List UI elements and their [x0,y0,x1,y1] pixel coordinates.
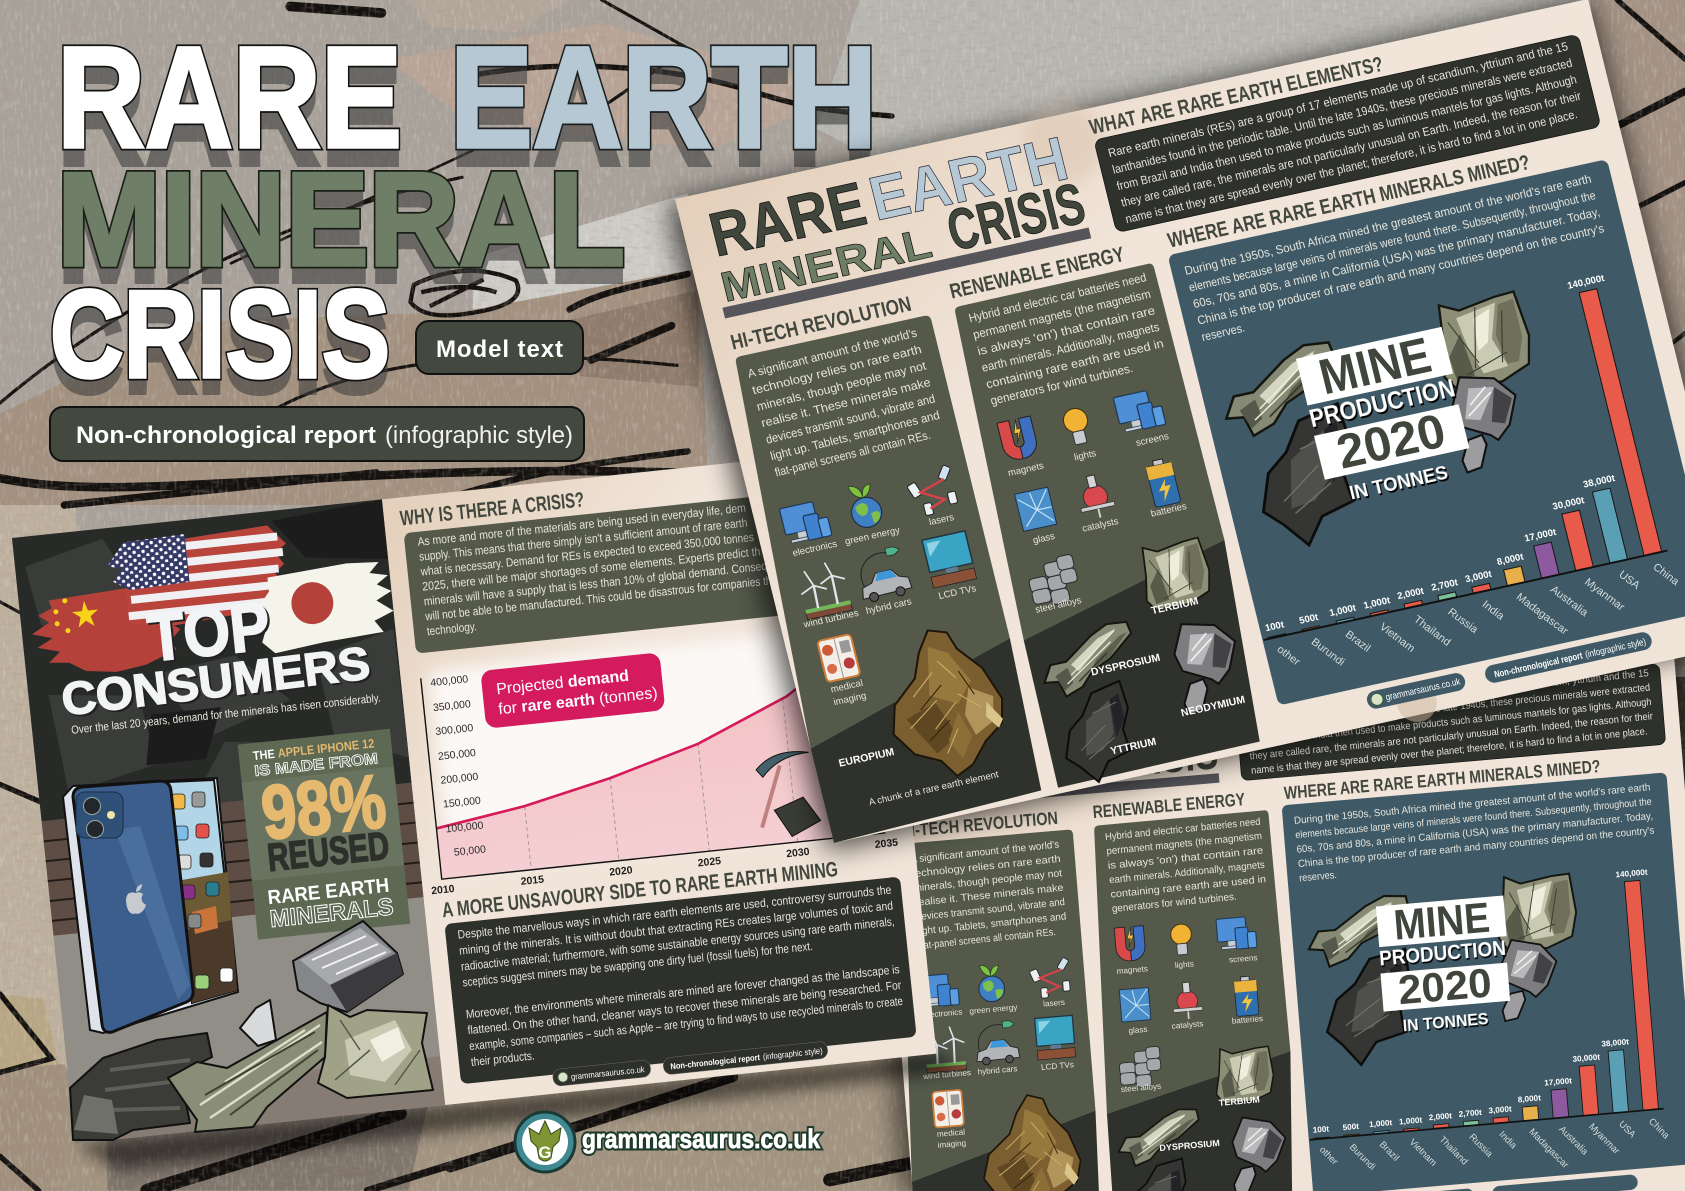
lower poster text: renewable energy [1092,788,1268,916]
lower poster text: where mined: During the 1950s, South Africa mined the greatest amount of the world's rare earth [1294,782,1651,827]
text block: why crisis: supply. This means that there simply isn't a sufficient amount of rare earth [418,516,748,564]
lower poster icon labels: TERBIUM [1219,1094,1260,1108]
icon and rock labels: wind turbines [802,608,860,631]
bar chart labels: Burundi [1309,636,1347,669]
heading: why crisis: WHY IS THERE A CRISIS? [399,488,585,531]
lower poster icon labels: screens [1229,953,1258,965]
heading: top consumers: TOP [146,590,276,678]
lower poster text: where mined: 60s, 70s and 80s, a mine in California (USA) was the primary manufacturer. Today, [1296,811,1653,856]
lower poster text: renewable energy: is always 'on') that contain rare [1107,845,1264,872]
text: renewable energy: Hybrid and electric car batteries need [967,270,1148,325]
text: what are rare earth elements: name is that they are spread evenly over the planet; therefore, it is hard to find a lot in one place. [1124,107,1579,226]
icon and rock labels: NEODYMIUM [1180,694,1247,719]
text: renewable energy: generators for wind turbines. [989,361,1134,408]
footer pills: Non-chronological report [670,1052,761,1071]
report type label: (infographic style) [385,422,573,449]
icon and rock labels: green energy [844,525,901,548]
bar chart labels: 8,000t [1496,551,1526,568]
stat box: 98% reused [238,729,410,940]
bar chart labels: Madagascar [1514,591,1570,638]
banner: mine production 2020 in tonnes: 2020 [1331,404,1451,480]
banner: mine production 2020 in tonnes [1294,323,1477,509]
bar chart labels: 1,000t [1363,595,1392,612]
title shadows: RARE [57,35,402,196]
bar chart labels: Myanmar [1582,576,1627,614]
rock: small silver bag [240,1000,276,1046]
text: hi-tech revolution: realise it. These minerals make [760,375,932,430]
stat box: 98% reused: 98% [258,759,390,856]
bar chart labels: Brazil [1343,629,1372,655]
lower poster text: what are rare earth elements: they are called rare, the minerals are not particularly unusual on Earth. Indeed, the reason for their [1249,711,1654,762]
heading: unsavoury side: A MORE UNSAVOURY SIDE TO RARE EARTH MINING [441,858,839,922]
lower poster text: hi-tech revolution: light up. Tablets, smartphones and [917,911,1067,938]
text: hi-tech revolution: HI-TECH REVOLUTION [728,293,914,354]
text block: why crisis: As more and more of the materials are being used in everyday life, dem [417,501,746,549]
bar chart labels: 3,000t [1464,569,1494,585]
bar chart labels: 140,000t [1566,273,1606,292]
lower poster text: hi-tech revolution: minerals, though people may not [913,868,1063,895]
icon and rock labels: batteries [1150,501,1188,520]
lower poster icon labels: green energy [969,1003,1019,1016]
poster: main upper right [673,0,1685,850]
lower poster text: renewable energy: permanent magnets (the magnetism [1106,831,1262,857]
title shadows: EARTH [450,35,877,196]
heading: top consumers: TOP [144,588,273,676]
icon and rock labels: steel alloys [1034,595,1083,616]
banner: mine production 2020 in tonnes: PRODUCTION [1307,374,1458,433]
lower poster bar chart labels: 500t [1342,1122,1360,1132]
lower poster text: renewable energy: containing rare earth are used in [1110,874,1267,901]
lower poster bar chart labels: 30,000t [1572,1053,1601,1064]
lower poster text: what are rare earth elements [1233,644,1656,778]
line chart: projected demand: 200,000 [440,772,479,787]
text block: unsavoury side [444,877,917,1084]
title word: crisis: CRISIS [50,266,390,404]
lower poster bar chart labels: 100t [1312,1124,1330,1135]
icon and rock labels: A chunk of a rare earth element [868,769,1000,808]
text block: why crisis: minerals will have a supply that is less than 10% of global demand. Conseq [423,559,768,609]
bar chart labels: 2,700t [1430,577,1460,594]
text: where mined: China is the top producer of rare earth and many countries depend on the country's [1196,221,1606,328]
text: what are rare earth elements [1087,13,1589,229]
text: hi-tech revolution: minerals, though people may not [755,358,928,414]
lower poster bar chart labels: China [1647,1116,1673,1141]
logo: grammarsaurus: G [538,1143,552,1162]
lower poster icon labels: magnets [1116,964,1148,976]
title shadows: CRISIS [50,282,390,420]
panel: why is there a crisis page [382,448,937,1105]
text block: unsavoury side: sceptics suggest miners may be swapping one dirty fuel (fossil fuels) for the next. [462,939,813,990]
lower poster bar chart labels: India [1497,1128,1520,1151]
text: where mined: During the 1950s, South Africa mined the greatest amount of the world's rare earth [1183,172,1593,278]
text: hi-tech revolution [728,292,947,482]
report type label: Non-chronological report [76,422,376,449]
lower poster text: where mined: WHERE ARE RARE EARTH MINERALS MINED? [1283,756,1601,803]
banner: mine production 2020 in tonnes: MINE [1314,327,1436,405]
text: renewable energy: containing rare earth are used in [984,336,1165,391]
lower poster icon labels: wind turbines [922,1068,971,1081]
footer pills [1385,636,1647,704]
line chart: projected demand: 100,000 [445,821,484,835]
text: where mined: WHERE ARE RARE EARTH MINERALS MINED? [1165,151,1532,253]
text: renewable energy: RENEWABLE ENERGY [947,243,1127,303]
stat box: 98% reused: IS MADE FROM [254,750,379,780]
lower poster banner: mine production 2020 in tonnes: 2020 [1396,960,1493,1013]
shadow of spread poster [75,1054,960,1170]
lower poster icon labels: DYSPROSIUM [1159,1138,1220,1153]
icon and rock labels: lasers [928,512,956,528]
text: renewable energy [947,239,1170,411]
lower poster text: hi-tech revolution: flat-panel screens all contain REs. [919,927,1056,952]
line chart: projected demand: 400,000 [430,674,469,689]
icon and rock labels: EUROPIUM [837,746,896,770]
lower poster text: where mined: China is the top producer of rare earth and many countries depend on the country's [1297,825,1655,870]
text: hi-tech revolution: flat-panel screens all contain REs. [773,428,932,480]
text block: unsavoury side: their products. [470,1048,535,1069]
bar chart labels [1199,272,1685,699]
lower poster text: what are rare earth elements: Rare earth minerals (REs) are a group of 17 elements made up of scandium, yttrium and the 15 [1245,668,1650,719]
line chart: projected demand [409,631,899,897]
lower poster bar chart labels: USA [1617,1118,1639,1140]
bar chart labels: Australia [1548,584,1591,620]
logo: grammarsaurus: grammarsaurus.co.uk [582,1124,821,1154]
lower poster bar chart labels: 3,000t [1488,1104,1512,1115]
rock: dark yttrium [70,1033,212,1140]
flag: japan [255,559,397,654]
lower poster text: where mined [1283,752,1657,885]
title [50,17,877,420]
lower poster icon labels: LCD TVs [1041,1060,1074,1072]
icon: dinosaur footprint [529,1121,561,1161]
line chart: projected demand: 250,000 [438,748,477,763]
text: where mined: elements because large veins of minerals were found there. Subsequently, throughout the [1187,188,1597,294]
poster title: EARTH [863,124,1075,234]
lower poster bar chart labels: Russia [1467,1131,1496,1159]
text block: why crisis: will not be able to be manufactured. This could be disastrous for companies th [424,573,772,624]
footer pills: grammarsaurus.co.uk [570,1064,646,1082]
text: what are rare earth elements: from Brazil and India then used to make products such as luminous mantels for gas lights. Although [1115,72,1578,193]
text block: unsavoury side: Despite the marvellous ways in which rare earth elements are used, controversy surrounds the [457,883,892,942]
lower poster bar chart labels: Burundi [1348,1141,1378,1172]
icon and rock labels: imaging [832,690,868,708]
lower poster icon labels: lasers [1043,998,1065,1009]
bar chart labels: China [1651,561,1682,589]
icon and rock labels: glass [1032,531,1056,546]
icon and rock labels: medical [830,678,864,696]
icon and rock labels: LCD TVs [937,583,978,602]
text: where mined: 60s, 70s and 80s, a mine in California (USA) was the primary manufacturer. Today, [1192,205,1601,311]
icon and rock labels: catalysts [1081,516,1120,535]
lower poster text: hi-tech revolution [900,808,1069,953]
rock: pale terbium pillow [318,1005,433,1098]
lower poster bar chart labels: other [1318,1144,1341,1167]
lower poster text: renewable energy: earth minerals. Additionally, magnets [1109,860,1265,886]
bar chart labels: 1,000t [1328,602,1358,619]
stat box: 98% reused: RARE EARTH [267,875,390,909]
bar chart labels: 500t [1298,612,1320,627]
lower poster bar chart labels: 8,000t [1517,1093,1541,1104]
title word: mineral: MINERAL [57,146,625,294]
footer pills: Non-chronological report [1493,650,1584,681]
title shadows: MINERAL [57,163,625,311]
lower poster title [894,683,1220,806]
bar chart labels: Russia [1446,606,1481,636]
report type label [50,407,584,461]
text: hi-tech revolution: light up. Tablets, smartphones and [769,408,941,463]
shadow of lower poster [862,640,1685,1191]
footer pills: grammarsaurus.co.uk [1385,676,1462,703]
panel: top consumers [12,499,445,1144]
lower poster bar chart labels: Vietnam [1407,1136,1440,1168]
lower poster bar chart labels: 17,000t [1544,1076,1573,1088]
lower poster text: what are rare earth elements: lanthanides found in the periodic table. Until the late 1940s, these precious minerals were extracted [1247,683,1651,734]
model text label [416,321,583,374]
line chart: projected demand: 2020 [609,865,633,879]
rock: green dysprosium slab [168,1012,327,1132]
lower poster bar chart labels: 2,000t [1429,1111,1453,1122]
stat box: 98% reused: MINERALS [269,893,395,933]
bar chart labels: 100t [1264,619,1286,634]
stat box: 98% reused: THE APPLE IPHONE 12 [252,736,375,763]
icon and rock labels: screens [1135,431,1170,449]
line chart: projected demand: 150,000 [443,796,482,811]
text block: why crisis: 2025, there will be major shortages of some elements. Experts predict th [422,544,761,594]
lower poster text: renewable energy: Hybrid and electric car batteries need [1105,817,1261,843]
poster title: RARE [703,170,873,270]
lower poster icon labels: catalysts [1171,1019,1204,1031]
lower poster title: RARE [896,699,1035,769]
poster: lower right copy [872,627,1685,1191]
title word: mineral: MINERAL [57,146,625,294]
text block: why crisis: technology. [426,619,477,638]
poster: top consumers and crisis spread [12,448,937,1144]
rock: silver neodymium block [293,921,403,1012]
lower poster bar chart labels: Madagascar [1527,1126,1571,1170]
text: what are rare earth elements: Rare earth minerals (REs) are a group of 17 elements made up of scandium, yttrium and the 15 [1107,39,1570,160]
illustration: rare earth rocks [70,921,433,1140]
lower poster bar chart labels: 140,000t [1615,868,1648,879]
lower poster bar chart labels: 1,000t [1399,1116,1423,1126]
logo: grammarsaurus: grammarsaurus.co.uk [582,1124,821,1154]
callout: projected demand: Projected demand [495,668,630,698]
bar chart labels: Thailand [1411,614,1453,649]
footer pills: (infographic style) [762,1046,823,1062]
lower poster icon labels: medical [937,1128,966,1139]
heading: top consumers: CONSUMERS [61,638,375,727]
lower poster title: CRISIS [1098,724,1220,789]
title shadows [50,35,877,420]
bar chart labels: 2,000t [1396,586,1426,602]
text: hi-tech revolution: devices transmit sound, vibrate and [764,391,937,447]
text: hi-tech revolution: A significant amount of the world's [746,326,919,381]
text: renewable energy: permanent magnets (the magnetism [972,287,1152,342]
icon and rock labels: TERBIUM [1150,595,1200,617]
stat box: 98% reused: REUSED [265,825,391,880]
logo: grammarsaurus [515,1112,821,1172]
text block: why crisis [404,486,872,654]
line chart: projected demand: 50,000 [453,844,487,859]
subtitle: demand: Over the last 20 years, demand for the minerals has risen considerably. [71,693,381,737]
poster title: MINERAL [716,219,936,311]
callout: projected demand [480,652,665,729]
icon: pickaxe and rock [755,750,822,840]
text block: unsavoury side: example, some companies – such as Apple – are trying to find ways to use recycled minerals to create [469,994,904,1053]
shadow of main poster [669,0,1685,850]
bar chart labels: India [1480,599,1507,623]
text block: unsavoury side: radioactive material; furthermore, with some sustainable energy sources using rare earth minerals, [460,914,895,974]
text: what are rare earth elements: lanthanides found in the periodic table. Until the late 1940s, these precious minerals were extracted [1111,56,1574,177]
icon and rock labels: YTTRIUM [1109,736,1158,757]
line chart: projected demand: 2025 [697,856,722,869]
lower poster icon labels: glass [1128,1025,1148,1035]
lower poster bar chart labels: 2,700t [1458,1108,1482,1119]
illustration: iphone 12 [63,778,238,1033]
line chart: projected demand: 2010 [431,884,455,897]
icon and rock labels: hybrid cars [865,596,913,617]
bar chart labels: Vietnam [1377,621,1417,655]
footer pills: (infographic style) [1584,637,1647,661]
text: where mined: reserves. [1200,321,1246,344]
lower poster banner: mine production 2020 in tonnes: PRODUCTION [1378,936,1507,971]
text block: unsavoury side: Moreover, the environments where minerals are mined are forever changed as the landscape is [465,962,900,1021]
lower poster text: hi-tech revolution: A significant amount of the world's [910,840,1060,866]
icon and rock labels: magnets [1007,460,1045,479]
icon and rock labels: electronics [791,539,839,559]
lower poster text: hi-tech revolution: realise it. These minerals make [914,883,1064,909]
line chart: projected demand: 350,000 [432,699,472,714]
banner: mine production 2020 in tonnes: IN TONNES [1348,463,1450,505]
lower poster icon labels: lights [1175,959,1194,970]
title word: earth: EARTH [450,17,877,178]
lower poster icon labels: imaging [937,1139,966,1150]
lower poster text: hi-tech revolution: HI-TECH REVOLUTION [900,808,1059,841]
poster title [701,123,1091,314]
lower poster title: MINERAL [899,749,1085,804]
bar chart labels: 30,000t [1552,495,1586,513]
flag: usa [105,524,293,632]
lower poster icon labels: steel alloys [1121,1082,1161,1094]
lower poster icon labels: electronics [923,1008,963,1020]
lower poster bar chart labels: Australia [1557,1123,1591,1157]
title word: earth: EARTH [450,17,877,178]
lower poster icon labels: batteries [1231,1014,1263,1026]
lower poster text: what are rare earth elements: name is that they are spread evenly over the planet; therefore, it is hard to find a lot in one place. [1251,726,1648,777]
line chart: projected demand: 2030 [786,847,810,860]
model text label: Model text [436,336,563,363]
text block: unsavoury side: flattened. On the other hand, cleaner ways to recover these minerals are being researched. For [467,978,902,1037]
line chart: projected demand: 300,000 [435,723,474,738]
bar chart labels: 38,000t [1582,473,1617,491]
text: renewable energy: is always 'on') that contain rare [976,303,1157,358]
lower poster banner: mine production 2020 in tonnes: IN TONNES [1402,1010,1489,1035]
lower poster banner: mine production 2020 in tonnes: MINE [1392,894,1492,950]
title word: rare: RARE [57,17,402,178]
text: where mined [1165,139,1611,346]
lower poster text: what are rare earth elements: WHAT ARE RARE EARTH ELEMENTS? [1233,657,1491,699]
lower poster bar chart labels: Brazil [1378,1139,1402,1163]
icon and rock labels: DYSPROSIUM [1090,652,1162,679]
icon and rock labels: lights [1073,448,1098,463]
heading: top consumers [52,578,375,728]
callout: projected demand: for rare earth (tonnes) [498,685,658,718]
flag: china [28,581,184,680]
text: renewable energy: earth minerals. Additionally, magnets [980,320,1161,375]
lower poster text: renewable energy: RENEWABLE ENERGY [1092,789,1246,822]
footer pills [552,1041,828,1087]
lower poster banner: mine production 2020 in tonnes [1375,893,1512,1037]
text: what are rare earth elements: WHAT ARE RARE EARTH ELEMENTS? [1087,53,1386,139]
text: what are rare earth elements: they are called rare, the minerals are not particularly unusual on Earth. Indeed, the reason for their [1120,89,1582,210]
title word: rare: RARE [57,17,402,178]
line chart: projected demand: 2015 [520,875,545,888]
lower poster bar chart labels: 1,000t [1369,1118,1393,1129]
lower poster text: renewable energy: generators for wind turbines. [1111,892,1237,915]
lower poster text: hi-tech revolution: technology relies on rare earth [912,854,1061,880]
poster title: CRISIS [941,171,1091,264]
lower poster icon labels: hybrid cars [977,1064,1018,1077]
title word: crisis: CRISIS [50,266,390,404]
lower poster bar chart labels: Thailand [1437,1134,1471,1167]
lower poster bar chart labels: 38,000t [1601,1037,1630,1049]
lower poster title: EARTH [1036,683,1212,756]
lower poster bar chart labels: Myanmar [1587,1121,1622,1156]
text: hi-tech revolution: technology relies on rare earth [751,342,923,397]
bar chart labels: USA [1616,569,1642,592]
lower poster text: hi-tech revolution: devices transmit sound, vibrate and [916,897,1066,923]
icon and rock labels [776,429,1252,815]
text block: why crisis: what is necessary. Demand for REs is expected to exceed 350,000 tonnes [419,530,755,579]
lower poster text: where mined: reserves. [1299,870,1337,884]
bar chart labels: 17,000t [1523,527,1558,545]
line chart: projected demand: 2035 [874,838,899,851]
bar chart labels: other [1275,643,1302,668]
lower poster bar chart labels [1294,867,1675,1191]
heading: top consumers: CONSUMERS [59,636,373,725]
text block: unsavoury side: mining of the minerals. It is without doubt that extracting REs creates large volumes of toxic and [459,898,894,958]
lower poster icon labels [914,953,1273,1173]
